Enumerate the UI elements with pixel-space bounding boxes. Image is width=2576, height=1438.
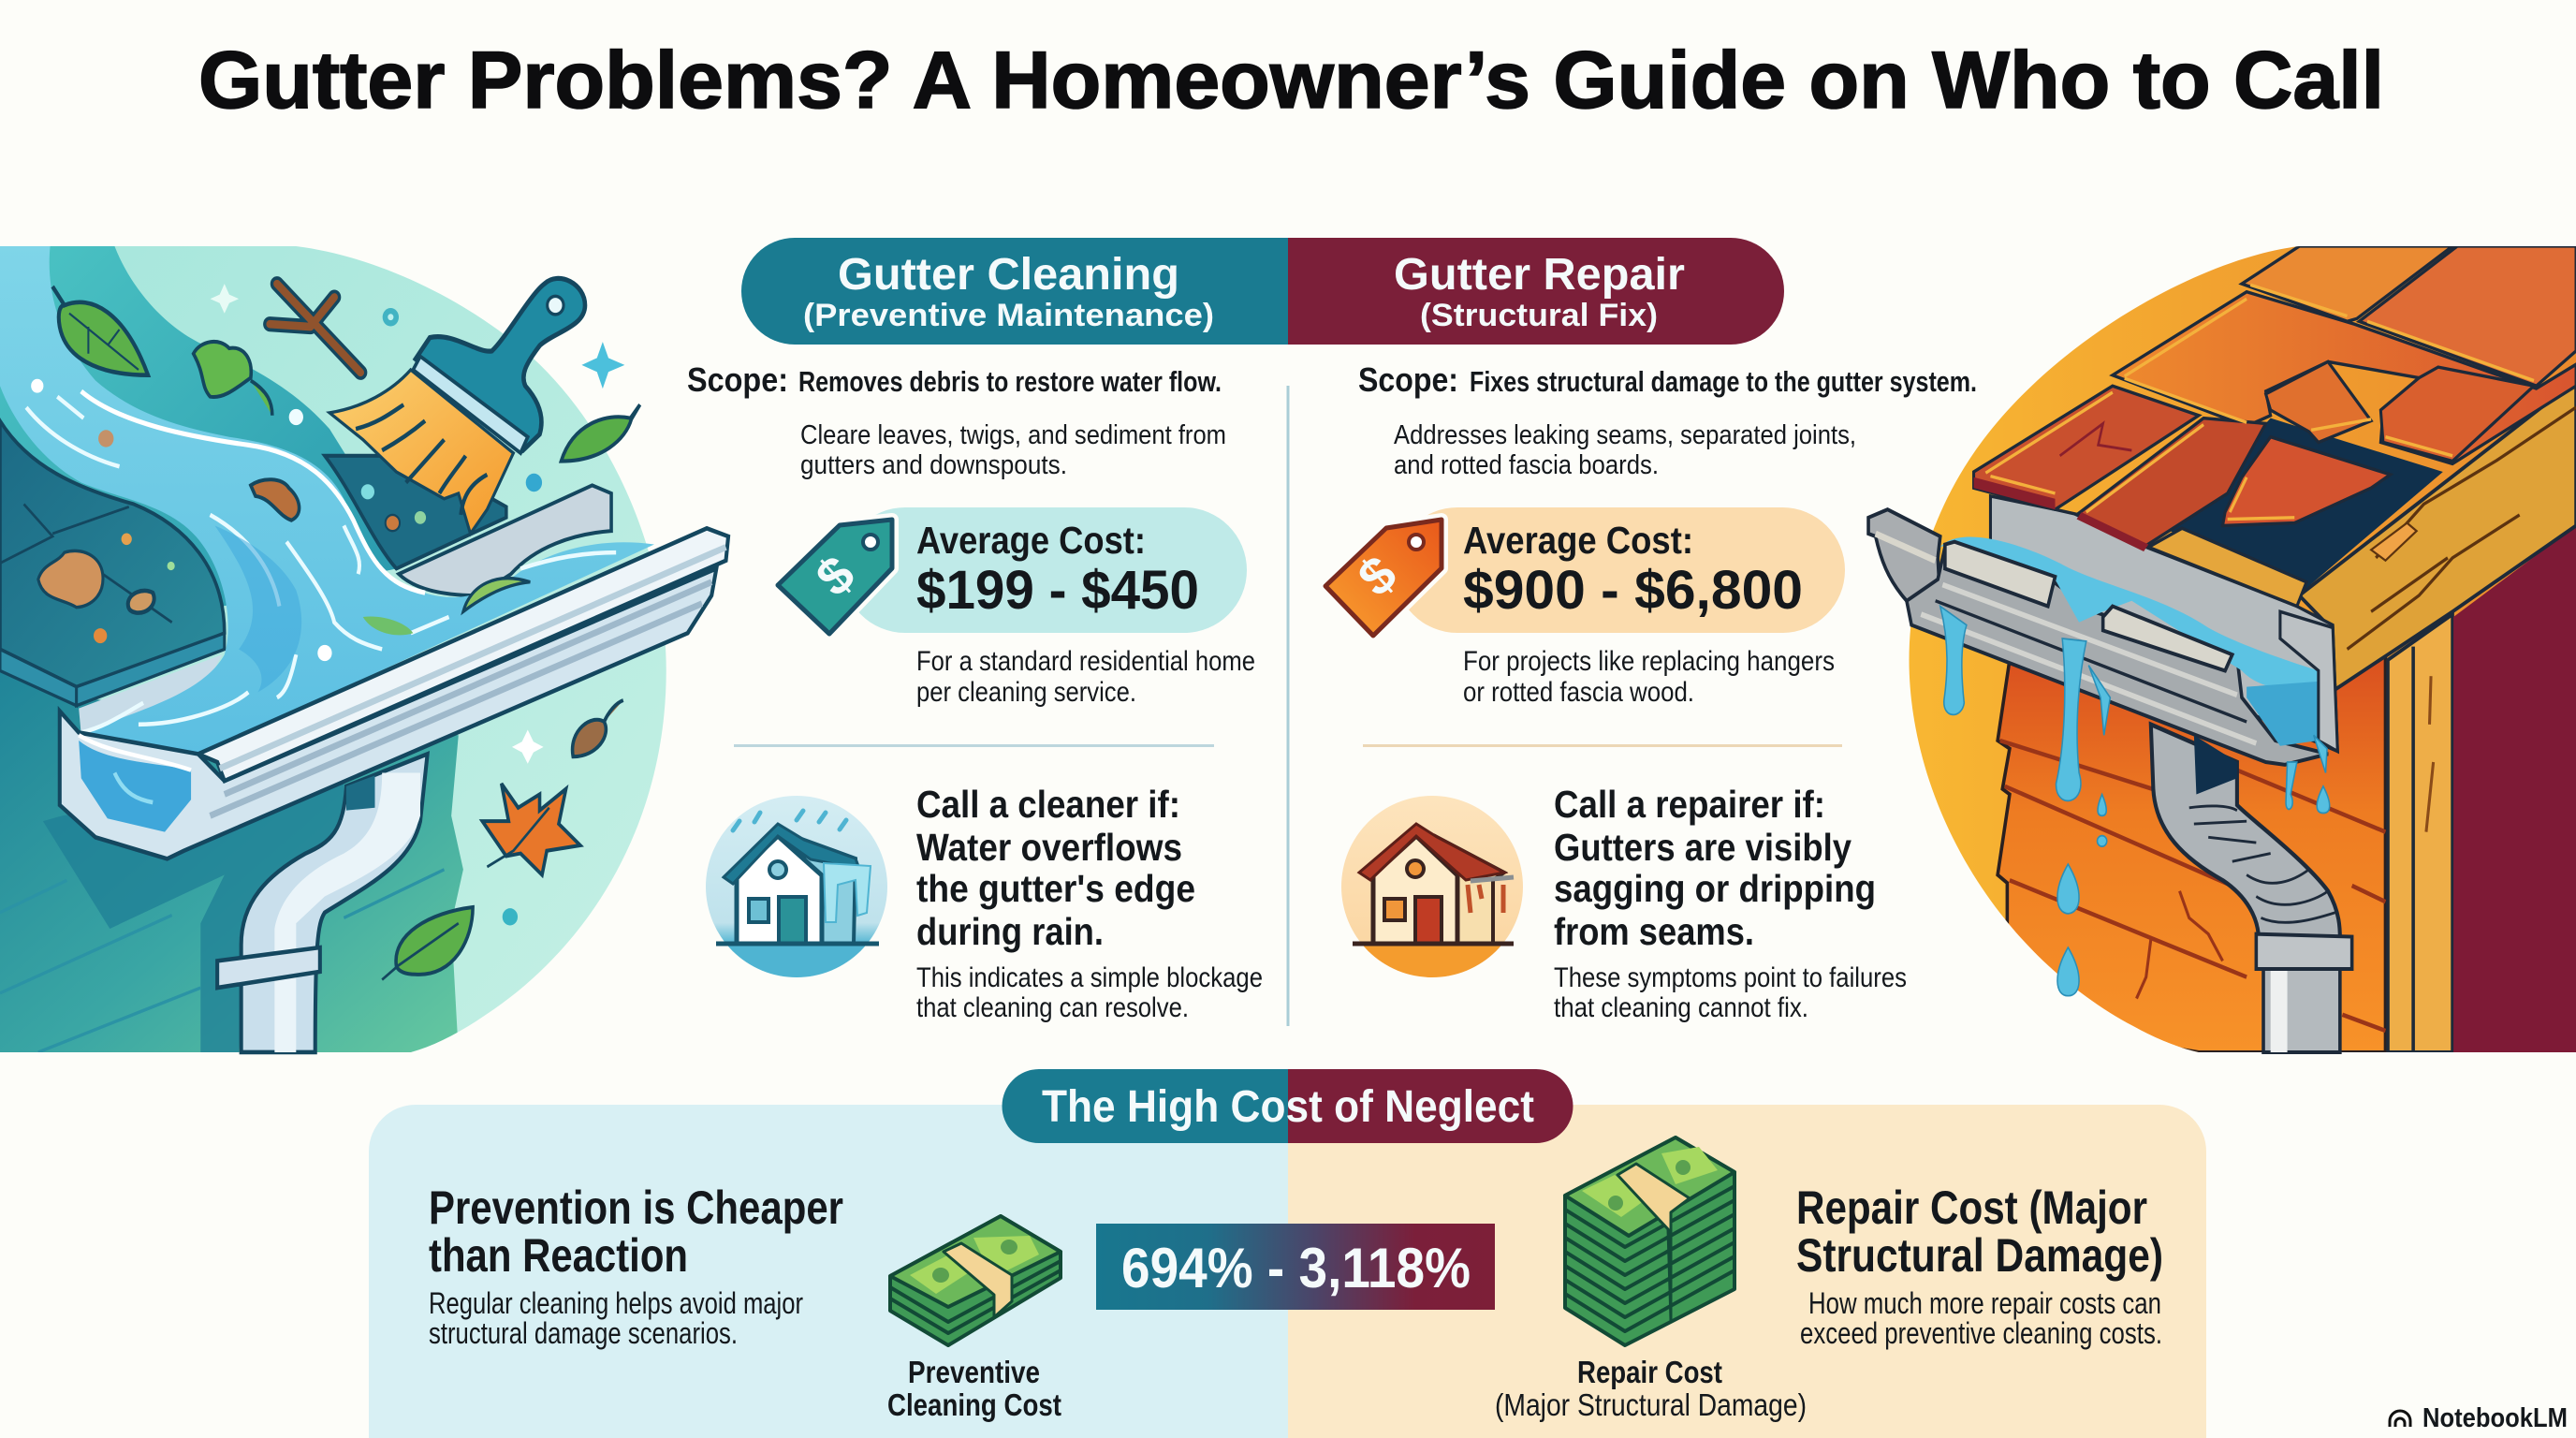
icon: sagging house bbox=[1341, 796, 1523, 977]
prevention text: structural damage scenarios. bbox=[429, 1316, 738, 1350]
gold tile edges bbox=[1985, 285, 2534, 520]
lower tile middle bbox=[2077, 418, 2266, 547]
repairer note: that cleaning cannot fix. bbox=[1554, 992, 1808, 1023]
label: repair cost bbox=[1495, 1355, 1807, 1422]
repairer note: These symptoms point to failures bbox=[1554, 962, 1907, 993]
price tag icon bbox=[778, 520, 892, 634]
maroon wall bbox=[2453, 525, 2576, 1052]
label: preventive cleaning cost bbox=[887, 1355, 1061, 1422]
stat box: 694% - 3,118% bbox=[1121, 1237, 1471, 1299]
call a cleaner text bbox=[916, 783, 1195, 953]
prevention heading: than Reaction bbox=[429, 1229, 688, 1282]
call a cleaner text: during rain. bbox=[916, 910, 1104, 953]
stat box bbox=[1096, 1224, 1495, 1310]
leaf top left bbox=[52, 286, 148, 375]
cost note bbox=[916, 646, 1255, 708]
center divider bbox=[1286, 386, 1290, 1026]
heading: Gutter Repair bbox=[1394, 250, 1685, 300]
cost note: For a standard residential home bbox=[916, 646, 1255, 677]
top tile left bbox=[2242, 246, 2452, 321]
maple stem bbox=[487, 808, 549, 867]
gutter back wall bbox=[399, 485, 611, 595]
call a cleaner text: the gutter's edge bbox=[916, 867, 1195, 910]
call a repairer text: from seams. bbox=[1554, 910, 1754, 953]
mint backdrop bbox=[0, 246, 666, 1052]
teal upper area bbox=[0, 246, 395, 607]
roof hole bbox=[2170, 418, 2443, 590]
cleaner note: This indicates a simple blockage bbox=[916, 962, 1263, 993]
section pill: the high cost of neglect bbox=[1002, 1069, 1573, 1143]
cleaner note: that cleaning can resolve. bbox=[916, 992, 1189, 1023]
broken fragment C bbox=[2223, 437, 2391, 525]
repairer note bbox=[1554, 962, 1907, 1023]
call a repairer text bbox=[1554, 783, 1876, 953]
twig bbox=[270, 284, 360, 373]
icon: small money stack bbox=[890, 1216, 1061, 1345]
call a cleaner text: Water overflows bbox=[916, 826, 1182, 869]
illustration: gutter cleaning bbox=[0, 246, 728, 1052]
water in trough bbox=[2247, 682, 2319, 746]
repair text: exceed preventive cleaning costs. bbox=[1800, 1316, 2162, 1350]
rail right bbox=[2103, 607, 2232, 670]
broken fragment A bbox=[2266, 361, 2371, 442]
gutter back plate bbox=[1990, 496, 2337, 752]
water flow bbox=[0, 246, 654, 754]
leaf curled bbox=[194, 342, 272, 416]
top tile right bbox=[2359, 246, 2576, 386]
scope description: and rotted fascia boards. bbox=[1394, 450, 1659, 480]
prevention text: Regular cleaning helps avoid major bbox=[429, 1286, 803, 1320]
header pill: gutter repair bbox=[1288, 238, 1784, 345]
prevention heading: Prevention is Cheaper bbox=[429, 1181, 843, 1234]
wood post bbox=[2388, 614, 2452, 1052]
maple leaf bbox=[482, 784, 580, 875]
cleaner note bbox=[916, 962, 1263, 1023]
debris in water bbox=[251, 479, 300, 521]
wood strip bbox=[2148, 528, 2306, 607]
scope: Fixes structural damage to the gutter system. bbox=[1470, 365, 1977, 398]
cost pill bbox=[1325, 507, 1845, 636]
water drips bbox=[1940, 607, 2330, 996]
cost label: Average Cost: bbox=[1463, 519, 1693, 562]
icon: large money stack bbox=[1565, 1137, 1734, 1345]
water highlights bbox=[26, 391, 616, 732]
leaf submerged bbox=[363, 616, 413, 635]
gutter top rail bbox=[198, 528, 728, 781]
prevention heading bbox=[429, 1181, 843, 1282]
repair text: How much more repair costs can bbox=[1808, 1286, 2161, 1320]
scope: Scope: bbox=[687, 360, 788, 399]
brick wall bbox=[1998, 654, 2385, 1052]
illustration: gutter repair bbox=[1868, 246, 2576, 1052]
cost value: $199 - $450 bbox=[916, 560, 1199, 621]
repair heading: Structural Damage) bbox=[1796, 1229, 2163, 1282]
price tag icon bbox=[1325, 520, 1442, 636]
label: repair cost: (Major Structural Damage) bbox=[1495, 1387, 1807, 1422]
call a repairer text: sagging or dripping bbox=[1554, 867, 1876, 910]
cost label: Average Cost: bbox=[916, 519, 1146, 562]
cost note: For projects like replacing hangers bbox=[1463, 646, 1835, 677]
subheading: (Structural Fix) bbox=[1420, 298, 1658, 333]
downspout strap bbox=[217, 947, 320, 988]
scope description: Addresses leaking seams, separated joints, bbox=[1394, 420, 1856, 450]
gutter trough bbox=[60, 568, 716, 858]
call a repairer text: Call a repairer if: bbox=[1554, 783, 1825, 826]
cost note: or rotted fascia wood. bbox=[1463, 677, 1694, 708]
title: Gutter Problems? A Homeowner’s Guide on Who to Call bbox=[198, 36, 2384, 125]
gutter inner bbox=[79, 654, 222, 735]
roof bbox=[0, 421, 225, 687]
amber backdrop bbox=[1910, 246, 2576, 1052]
scope bbox=[1358, 360, 1977, 399]
lower tile left bbox=[1974, 386, 2199, 509]
main gutter body bbox=[1907, 547, 2328, 765]
end plate bbox=[2280, 611, 2337, 752]
repair heading: Repair Cost (Major bbox=[1796, 1181, 2147, 1234]
middle tile row bbox=[2113, 292, 2576, 463]
wood fascia bbox=[2299, 380, 2576, 690]
scope description bbox=[1394, 420, 1856, 480]
call a repairer text: Gutters are visibly bbox=[1554, 826, 1852, 869]
scope bbox=[687, 360, 1222, 399]
house wall bbox=[0, 654, 463, 1052]
header pill: gutter cleaning bbox=[741, 238, 1288, 345]
subheading: (Preventive Maintenance) bbox=[803, 298, 1214, 333]
scope: Removes debris to restore water flow. bbox=[798, 365, 1222, 398]
icon: overflowing house bbox=[706, 796, 887, 977]
section pill: the high cost of neglect: The High Cost of Neglect bbox=[1042, 1082, 1534, 1132]
leaf bottom bbox=[382, 907, 473, 979]
downspout collar and pipe bbox=[2256, 934, 2352, 1052]
price tag icon: $ bbox=[1346, 544, 1408, 608]
pebble bbox=[128, 591, 154, 613]
water on gutter bbox=[1940, 537, 2319, 692]
repair heading bbox=[1796, 1181, 2163, 1282]
bottom panel: repair cost bbox=[1288, 1105, 2206, 1438]
scene clipped to backdrop bbox=[0, 246, 506, 1052]
call a cleaner text: Call a cleaner if: bbox=[916, 783, 1180, 826]
heading: Gutter Cleaning bbox=[838, 250, 1179, 300]
leaf in gutter bbox=[463, 579, 530, 611]
broken fragment B bbox=[2380, 367, 2534, 462]
label: repair cost: Repair Cost bbox=[1577, 1355, 1722, 1389]
downspout bbox=[242, 754, 428, 1052]
scope description: gutters and downspouts. bbox=[800, 450, 1067, 480]
back roof behind brush bbox=[325, 456, 506, 568]
scope description bbox=[800, 420, 1226, 480]
column: repair bbox=[1325, 360, 1977, 1023]
left gutter piece bbox=[1868, 509, 1940, 625]
cost note: per cleaning service. bbox=[916, 677, 1136, 708]
cost note bbox=[1463, 646, 1835, 708]
cost pill bbox=[778, 507, 1247, 634]
rail left bbox=[1945, 542, 2056, 607]
repair text bbox=[1800, 1286, 2162, 1350]
prevention text bbox=[429, 1286, 803, 1350]
debris clump bbox=[38, 550, 103, 608]
price tag icon: $ bbox=[804, 544, 866, 608]
water in trough bbox=[79, 741, 191, 832]
scope: Scope: bbox=[1358, 360, 1458, 399]
label: preventive cleaning cost: Preventive bbox=[908, 1355, 1040, 1389]
sparkles and dots bbox=[31, 284, 624, 925]
scene clipped to backdrop bbox=[1974, 246, 2576, 1052]
scope description: Cleare leaves, twigs, and sediment from bbox=[800, 420, 1226, 450]
bottom panel: prevention bbox=[369, 1105, 1288, 1438]
leaf right bbox=[561, 404, 640, 462]
brush bbox=[329, 278, 585, 534]
column: cleaning bbox=[687, 360, 1263, 1023]
downspout bbox=[2151, 725, 2340, 939]
label: preventive cleaning cost: Cleaning Cost bbox=[887, 1387, 1061, 1422]
acorn bbox=[573, 700, 623, 756]
cost value: $900 - $6,800 bbox=[1463, 560, 1803, 621]
